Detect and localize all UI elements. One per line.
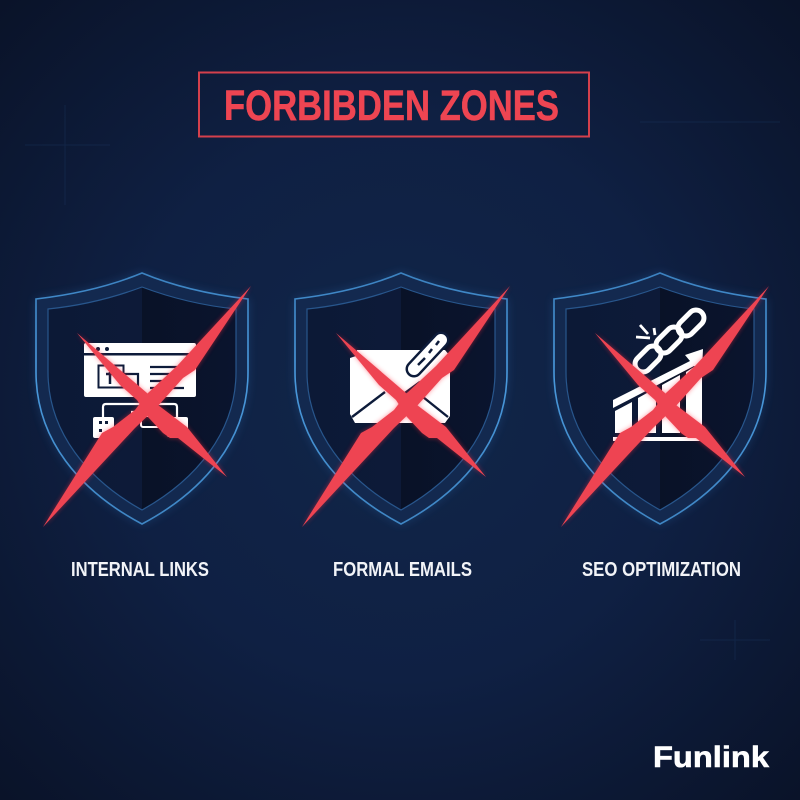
icon: shield bbox=[554, 273, 766, 524]
panel: seo optimization bbox=[554, 273, 769, 581]
logo: Funlink: Funlink bbox=[653, 741, 769, 774]
icon: broken chain and rising chart bbox=[613, 307, 707, 441]
title bbox=[199, 72, 589, 136]
icon: shield bbox=[295, 273, 507, 524]
icon: shield bbox=[36, 273, 248, 524]
icon: red cross bbox=[561, 286, 769, 527]
icon: red cross bbox=[43, 286, 251, 527]
label: SEO OPTIMIZATION bbox=[582, 559, 741, 581]
icon: envelope with paperclip bbox=[350, 340, 450, 423]
panel: internal links bbox=[36, 273, 251, 581]
panel: formal emails bbox=[295, 273, 510, 581]
label: FORMAL EMAILS bbox=[333, 559, 472, 581]
icon: website hierarchy bbox=[84, 343, 196, 438]
icon: red cross bbox=[302, 286, 510, 527]
title: FORBIBDEN ZONES bbox=[224, 82, 559, 130]
label: INTERNAL LINKS bbox=[71, 559, 209, 581]
